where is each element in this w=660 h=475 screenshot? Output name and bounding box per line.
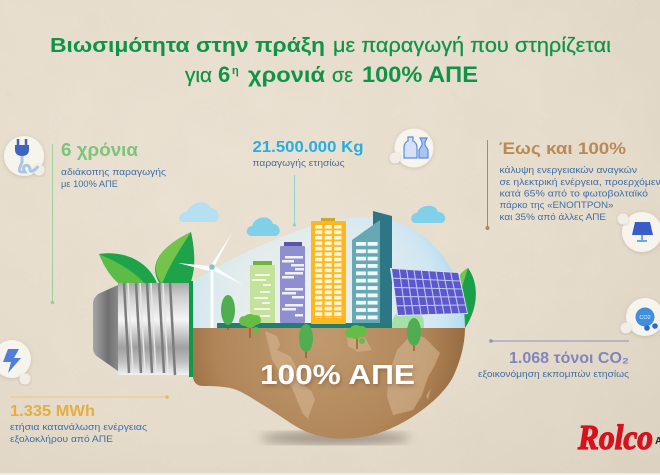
panel: MWh [0,340,169,445]
icon: bottles [390,128,434,168]
panel: up to 100% [486,139,660,252]
title: Βιωσιμότητα στην πράξη [50,35,325,57]
text: up to 100% detail: και 35% από άλλες ΑΠΕ [500,212,606,223]
logo: Rolco: Rolco [577,418,653,457]
panel: annual production [252,128,434,227]
text: MWh detail: ετήσια κατανάλωση ενέργειας [10,422,147,433]
earth globe [193,328,465,439]
yellow building [311,218,346,324]
text: CO2 detail: εξοικονόμηση εκπομπών ετησίως [478,369,629,380]
text: 6 years detail [61,167,166,190]
text: production detail: παραγωγής ετησίως [252,158,345,169]
screw base [93,281,193,377]
building base [217,323,393,328]
heading: up to 100%: Έως και 100% [499,139,626,158]
panel: CO2 [478,298,660,380]
light bulb illustration [93,202,476,444]
text: up to 100% detail: κάλυψη ενεργειακών αναγκών [500,165,637,176]
leaves [99,232,476,328]
trees [221,295,421,358]
title: με παραγωγή που στηρίζεται [333,35,611,57]
glass dome [193,217,465,328]
text: up to 100% detail: σε ηλεκτρική ενέργεια, προερχόμενη [500,177,660,188]
text: 6 years detail: με 100% ΑΠΕ [61,179,118,190]
heading: CO2: 1.068 τόνοι CO₂ [509,350,629,367]
text: MWh detail: εξολοκλήρου από ΑΠΕ [10,434,113,445]
connector line: up to 100% [486,140,490,230]
connector line: MWh [10,395,169,399]
green building [250,261,275,323]
title: για [185,65,212,87]
connector line: production [293,175,296,227]
title [50,35,611,87]
clouds [179,202,445,236]
text: up to 100% detail [500,165,660,223]
solar panel [390,268,468,328]
text: up to 100% detail: πάρκο της «ΕΝΟΠΤΡΟΝ» [500,200,614,211]
title: η [232,65,239,77]
ground shadow [260,432,410,444]
heading: production: 21.500.000 Kg [252,139,364,156]
connector line: 6 years [51,144,54,304]
icon: solar panel [618,212,660,252]
teal building [352,211,392,323]
icon: CO2 bubbles: CO2 [639,315,651,321]
text: MWh detail [10,422,147,445]
title: 6 [218,62,230,87]
title: σε [332,65,353,87]
title: χρονιά [248,64,325,87]
panel: 6 years [4,136,166,304]
title: 100% ΑΠΕ [362,62,478,87]
continents [265,331,440,422]
purple building [280,242,305,323]
heading: 6 years: 6 χρόνια [61,140,138,160]
icon: lightning [0,340,31,384]
wind turbine [178,233,243,328]
text: 6 years detail: αδιάκοπης παραγωγής [61,167,166,178]
text: up to 100% detail: κατά 65% από το φωτοβολταϊκό [500,188,648,200]
icon: plug [4,136,44,176]
label: 100% APE: 100% ΑΠΕ [260,359,415,390]
connector line: CO2 [489,339,629,343]
heading: MWh: 1.335 MWh [10,403,95,420]
icon: CO2 bubbles [620,298,660,336]
